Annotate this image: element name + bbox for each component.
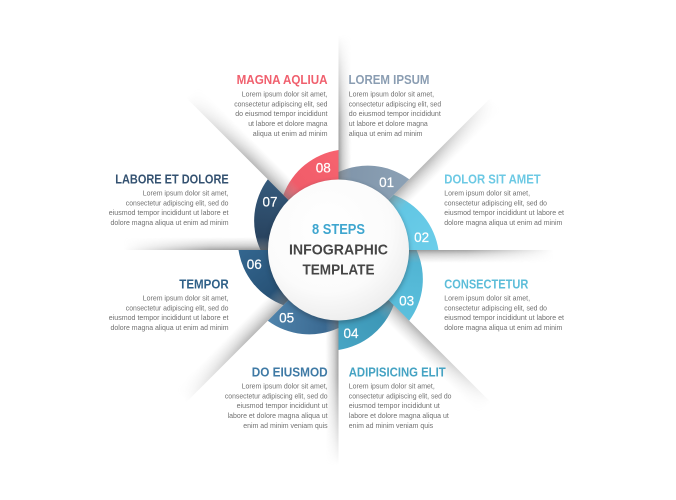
text block: step 02 Dolor Sit Amet: dolore magna aliqua ut enim ad minim [444, 218, 562, 227]
text block: step 05 Do Eiusmod: Lorem ipsum dolor sit amet, [242, 382, 328, 390]
ray: upper left [194, 105, 298, 200]
text block: step 03 Consectetur: consectetur adipiscing elit, sed do [444, 303, 547, 312]
center circle [268, 180, 410, 323]
text block: step 03 Consectetur [444, 276, 564, 332]
segment numbers [247, 160, 429, 341]
text block: step 02 Dolor Sit Amet: Lorem ipsum dolor sit amet, [444, 188, 530, 198]
text block: step 03 Consectetur: dolore magna aliqua ut enim ad minim [444, 323, 562, 332]
text block: step 08 Magna Aqliua: MAGNA AQLIUA [237, 72, 328, 87]
segment 07 [254, 179, 338, 250]
text block: step 08 Magna Aqliua: do eiusmod tempor incididunt [235, 109, 328, 118]
text block: step 07 Labore Et Dolore: Lorem ipsum dolor sit amet, [143, 188, 228, 198]
text block: step 02 Dolor Sit Amet: DOLOR SIT AMET [444, 171, 541, 186]
text block: step 05 Do Eiusmod: enim ad minim veniam quis [243, 421, 328, 430]
text block: step 04 Adipisicing Elit: Lorem ipsum dolor sit amet, [349, 382, 435, 390]
text block: step 05 Do Eiusmod: eiusmod tempor incididunt ut [237, 401, 328, 410]
text block: step 06 Tempor: dolore magna aliqua ut enim ad minim [110, 323, 228, 332]
text block: step 01 Lorem Ipsum: LOREM IPSUM [348, 72, 430, 87]
text block: step 01 Lorem Ipsum: aliqua ut enim ad minim [349, 129, 422, 138]
circular segments ring [229, 140, 448, 360]
text block: step 06 Tempor: Lorem ipsum dolor sit amet, [143, 294, 228, 302]
text block: step 01 Lorem Ipsum: do eiusmod tempor incididunt [349, 109, 441, 118]
ray: right [408, 250, 545, 261]
text block: step 02 Dolor Sit Amet: consectetur adipiscing elit, sed do [444, 198, 547, 207]
ray: upper right [388, 106, 484, 210]
text block: step 08 Magna Aqliua: consectetur adipiscing elit, sed [234, 99, 328, 108]
text block: step 08 Magna Aqliua: Lorem ipsum dolor sit amet, [242, 90, 328, 98]
ray: lower left [194, 289, 288, 394]
text block: step 06 Tempor: consectetur adipiscing elit, sed do [126, 303, 228, 312]
center title [289, 221, 388, 278]
segment 08 [279, 140, 388, 250]
text block: step 03 Consectetur: eiusmod tempor incididunt ut labore et [444, 313, 564, 322]
segment 05 [268, 250, 338, 334]
text block: step 08 Magna Aqliua: ut labore et dolore magna [248, 119, 328, 128]
ray: left [132, 238, 268, 250]
text block: step 07 Labore Et Dolore: consectetur adipiscing elit, sed do [126, 198, 228, 207]
text block: step 04 Adipisicing Elit: ADIPISICING ELIT [349, 364, 446, 379]
center title: INFOGRAPHIC [289, 242, 388, 258]
segment 04 [289, 250, 398, 360]
segment 01 [338, 166, 409, 250]
ray: bottom [327, 320, 338, 456]
text block: step 08 Magna Aqliua: aliqua ut enim ad minim [253, 129, 328, 138]
segment 02 [338, 190, 448, 300]
text block: step 04 Adipisicing Elit: enim ad minim veniam quis [349, 421, 433, 430]
segment numbers: 05 [279, 310, 294, 326]
text block: step 04 Adipisicing Elit: labore et dolore magna aliqua ut [349, 411, 449, 420]
text block: step 06 Tempor: eiusmod tempor incididunt ut labore et [109, 313, 228, 322]
center title: TEMPLATE [302, 262, 374, 278]
text block: step 04 Adipisicing Elit [349, 364, 452, 430]
segment numbers: 02 [414, 230, 429, 245]
text block: step 05 Do Eiusmod: labore et dolore magna aliqua ut [228, 411, 328, 420]
radial ray shadows [124, 35, 554, 465]
segment numbers: 01 [379, 175, 394, 190]
text block: step 04 Adipisicing Elit: consectetur adipiscing elit, sed do [349, 391, 452, 400]
text block: step 01 Lorem Ipsum: consectetur adipiscing elit, sed [349, 99, 441, 108]
segment numbers: 04 [343, 326, 359, 341]
text block: step 07 Labore Et Dolore: LABORE ET DOLORE [115, 171, 229, 186]
text block: step 05 Do Eiusmod [225, 364, 328, 430]
center title: 8 STEPS [312, 221, 365, 238]
text block: step 02 Dolor Sit Amet [444, 171, 564, 227]
ray: lower right [378, 300, 482, 395]
text block: step 01 Lorem Ipsum: Lorem ipsum dolor sit amet, [349, 90, 434, 98]
text block: step 01 Lorem Ipsum: ut labore et dolore magna [349, 119, 429, 128]
ray: top [338, 44, 350, 180]
segment 06 [229, 200, 338, 310]
segment 03 [338, 250, 423, 321]
text block: step 06 Tempor: TEMPOR [179, 276, 229, 291]
text block: step 02 Dolor Sit Amet: eiusmod tempor incididunt ut labore et [444, 208, 564, 217]
text block: step 05 Do Eiusmod: DO EIUSMOD [252, 364, 328, 379]
segment numbers: 07 [262, 194, 278, 210]
segment numbers: 06 [247, 257, 262, 272]
text block: step 07 Labore Et Dolore: eiusmod tempor incididunt ut labore et [109, 208, 228, 217]
text block: step 08 Magna Aqliua [234, 72, 328, 138]
text block: step 06 Tempor [109, 276, 229, 332]
text block: step 05 Do Eiusmod: consectetur adipiscing elit, sed do [225, 391, 328, 400]
segment numbers: 03 [399, 294, 414, 308]
text block: step 07 Labore Et Dolore [109, 171, 229, 227]
segment numbers: 08 [316, 160, 331, 176]
text block: step 07 Labore Et Dolore: dolore magna aliqua ut enim ad minim [110, 218, 228, 227]
text block: step 03 Consectetur: CONSECTETUR [444, 276, 529, 291]
text block: step 01 Lorem Ipsum [348, 72, 441, 138]
text block: step 04 Adipisicing Elit: eiusmod tempor incididunt ut [349, 401, 440, 410]
text block: step 03 Consectetur: Lorem ipsum dolor sit amet, [444, 294, 530, 302]
